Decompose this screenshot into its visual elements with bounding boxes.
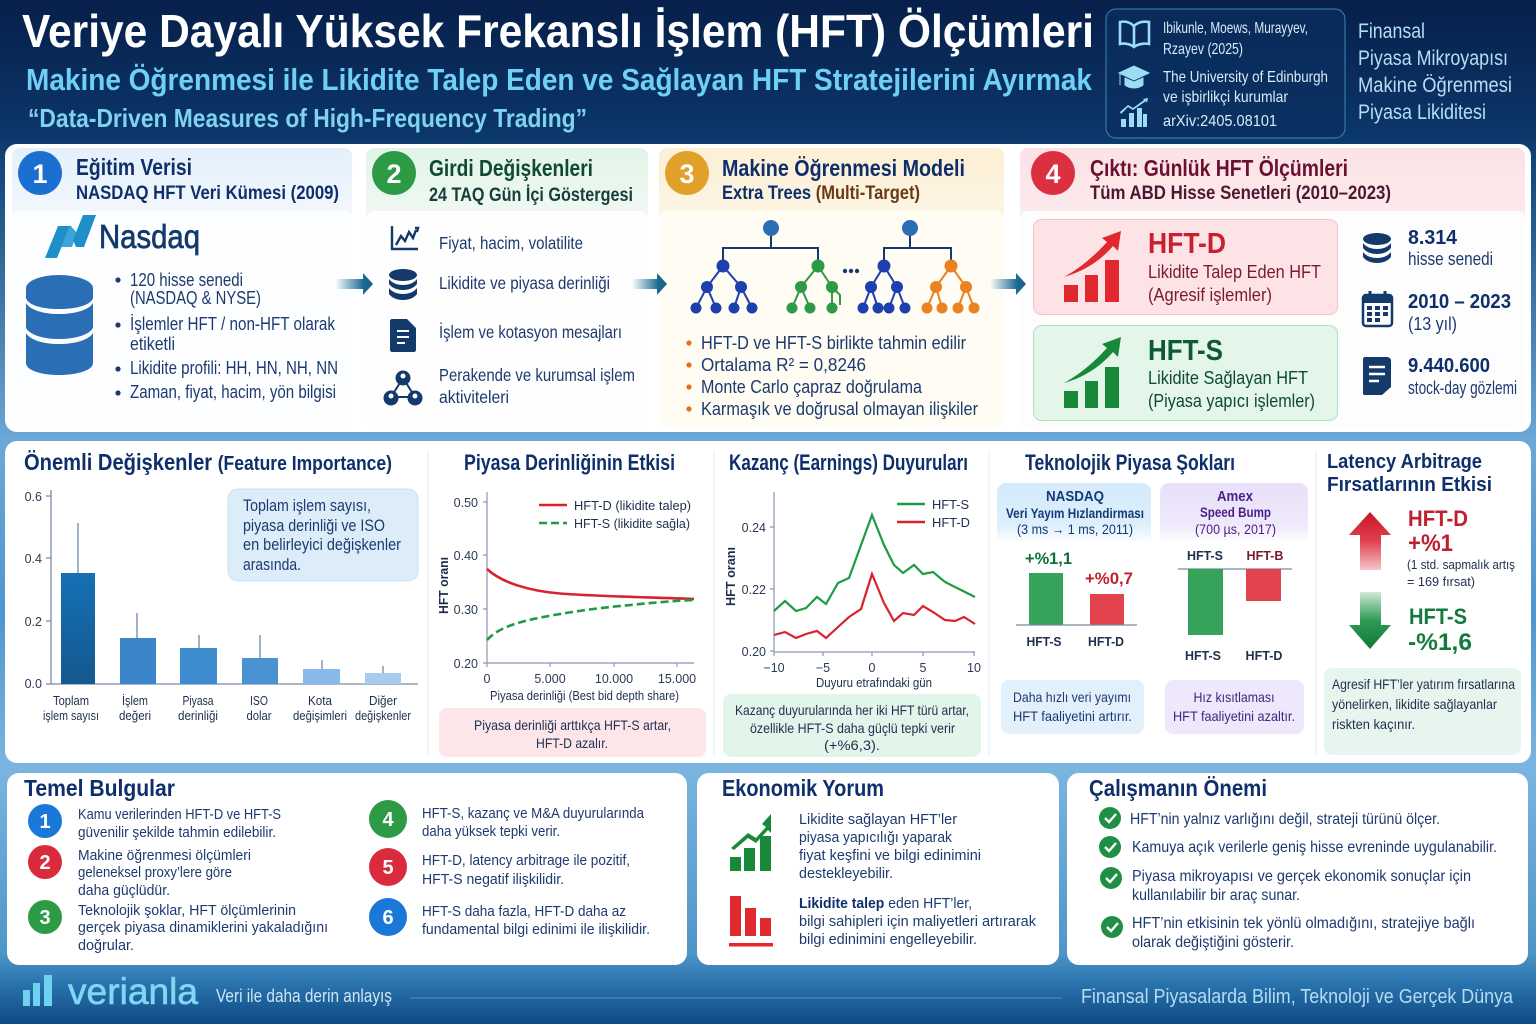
- line chart: 5: [920, 661, 927, 675]
- line chart: 0: [869, 661, 876, 675]
- check item 4: olarak değiştiğini gösterir.: [1132, 934, 1294, 951]
- topic tags: Piyasa Likiditesi: [1358, 101, 1486, 124]
- panel: input variables: [366, 148, 648, 427]
- bar chart: ISO: [250, 693, 268, 708]
- panel: training data: [12, 148, 352, 427]
- line chart: 0.50: [454, 496, 478, 510]
- bar chart: [1178, 548, 1292, 663]
- diagram: random forest trees: [690, 220, 980, 314]
- brand name: verianla: [68, 971, 198, 1012]
- callout: [1324, 668, 1521, 755]
- bar chart: derinliği: [178, 708, 218, 723]
- legend: HFT-S (likidite sağla): [574, 516, 690, 531]
- bar chart: +%1,1: [1025, 549, 1072, 568]
- stat: stocks: [1363, 227, 1493, 269]
- liquidity demanders text: bilgi edinimini engelleyebilir.: [799, 931, 977, 948]
- paper metadata text: [1163, 20, 1328, 130]
- heading: Önemli Değişkenler (Feature Importance): [24, 449, 392, 475]
- heading: Latency Arbitrage: [1327, 451, 1482, 473]
- training data bullets: etiketli: [130, 334, 175, 354]
- finding 1: 1: [39, 811, 51, 833]
- liquidity demanders text: [799, 895, 1036, 948]
- bar chart: Kota: [308, 693, 333, 708]
- step badge 2: 2: [386, 159, 402, 189]
- training data bullets: [115, 270, 338, 402]
- stat: stocks: hisse senedi: [1408, 249, 1493, 269]
- icon: Nasdaq logo: Nasdaq: [99, 218, 200, 255]
- line chart: 0.30: [454, 603, 478, 617]
- callout: Kazanç duyurularında her iki HFT türü artar,: [735, 702, 969, 718]
- step badge 4: 4: [1045, 159, 1061, 189]
- heading: Kazanç (Earnings) Duyuruları: [729, 450, 968, 475]
- input variable list: [439, 233, 635, 407]
- callout: Daha hızlı veri yayımı: [1013, 689, 1131, 705]
- check item 2: Kamuya açık verilerle geniş hisse evreninde uygulanabilir.: [1132, 839, 1497, 856]
- callout: [439, 708, 706, 757]
- input variable list: Likidite ve piyasa derinliği: [439, 273, 610, 293]
- callout: HFT-D azalır.: [536, 735, 608, 751]
- HFT-S effect: HFT-S: [1409, 604, 1467, 629]
- bar chart: [25, 490, 418, 723]
- callout: HFT faaliyetini artırır.: [1013, 708, 1132, 724]
- arrow: model to output: [990, 273, 1026, 295]
- callout: riskten kaçınır.: [1332, 716, 1415, 732]
- heading: Teknolojik Piyasa Şokları: [1025, 450, 1235, 475]
- icon: red bars: [729, 896, 773, 946]
- check item 1: HFT’nin yalnız varlığını değil, strateji türünü ölçer.: [1130, 811, 1440, 828]
- HFT-S effect: -%1,6: [1408, 629, 1472, 656]
- chart panel: technology shocks: [997, 450, 1308, 734]
- liquidity providers text: destekleyebilir.: [799, 865, 893, 882]
- callout: Hız kısıtlaması: [1194, 689, 1274, 705]
- liquidity demanders text: bilgi sahipleri için maliyetleri artırarak: [799, 913, 1036, 930]
- finding 3: Teknolojik şoklar, HFT ölçümlerinin: [78, 902, 296, 919]
- paper title: “Data-Driven Measures of High-Frequency Trading”: [28, 103, 587, 133]
- finding 3: gerçek piyasa dinamiklerini yakaladığını: [78, 919, 328, 936]
- finding 6: 6: [382, 907, 394, 929]
- bar chart: HFT-S: [1185, 648, 1221, 663]
- finding 5: HFT-S negatif ilişkilidir.: [422, 871, 564, 888]
- paper metadata text: Rzayev (2025): [1163, 41, 1243, 58]
- bar chart: HFT-D: [1246, 648, 1282, 663]
- step badge 3: [665, 151, 709, 195]
- card: Amex speed bump: [1160, 483, 1308, 663]
- icon: database: [26, 275, 93, 375]
- line chart: 5.000: [534, 672, 566, 686]
- icon: line chart: [392, 226, 418, 249]
- liquidity providers text: [799, 811, 981, 882]
- HFT-D effect: [1407, 506, 1515, 589]
- finding 2: 2: [39, 852, 51, 874]
- bar chart: Toplam: [53, 693, 89, 708]
- header: title block: [22, 5, 1094, 133]
- chart panel: feature importance: [24, 449, 418, 723]
- finding 2: geleneksel proxy’lere göre: [78, 864, 232, 881]
- bar chart: değişkenler: [355, 708, 412, 723]
- heading: Eğitim Verisi: [76, 154, 192, 180]
- panel: key findings: [7, 773, 687, 965]
- line chart: Piyasa derinliği (Best bid depth share): [490, 688, 679, 703]
- liquidity demanders text: Likidite talep eden HFT’ler,: [799, 895, 972, 912]
- icon: graduation cap: [1119, 66, 1149, 88]
- card: HFT-D: (Agresif işlemler): [1148, 285, 1272, 305]
- training data bullets: 120 hisse senedi: [130, 270, 243, 290]
- subheading: Extra Trees (Multi-Target): [722, 183, 920, 204]
- card: HFT-S: HFT-S: [1148, 335, 1223, 367]
- heading: Piyasa Derinliğinin Etkisi: [464, 450, 675, 475]
- HFT-D effect: (1 std. sapmalık artış: [1407, 557, 1515, 572]
- heading: Çalışmanın Önemi: [1089, 775, 1267, 801]
- legend: HFT-D: [932, 515, 970, 530]
- HFT-D effect: HFT-D: [1408, 506, 1468, 531]
- line chart: −10: [763, 661, 785, 675]
- paper info box: [1106, 9, 1345, 138]
- check item 2: [1099, 836, 1497, 858]
- finding 6: HFT-S daha fazla, HFT-D daha az: [422, 903, 626, 920]
- icon: red growth bars: [1064, 231, 1121, 302]
- line chart: [436, 492, 696, 703]
- heading: Girdi Değişkenleri: [429, 155, 593, 181]
- card: HFT-S: (Piyasa yapıcı işlemler): [1148, 391, 1315, 411]
- topic tags: [1358, 20, 1512, 124]
- bar chart: 0.4: [25, 552, 42, 566]
- title: Veriye Dayalı Yüksek Frekanslı İşlem (HFT) Ölçümleri: [22, 5, 1094, 57]
- finding 2: Makine öğrenmesi ölçümleri: [78, 847, 251, 864]
- topic tags: Makine Öğrenmesi: [1358, 74, 1512, 97]
- card: HFT-S: [1034, 326, 1338, 420]
- subheading: Tüm ABD Hisse Senetleri (2010–2023): [1090, 183, 1391, 204]
- card: HFT-S: Likidite Sağlayan HFT: [1148, 368, 1308, 388]
- finding 3: [28, 900, 328, 954]
- step badge 1: [18, 151, 62, 195]
- icon: database: [389, 269, 417, 300]
- bar chart: HFT-S: [1026, 634, 1062, 649]
- subheading: 24 TAQ Gün İçi Göstergesi: [429, 185, 633, 206]
- model bullets: [686, 332, 978, 419]
- line chart: 0: [484, 672, 491, 686]
- stat: period: [1363, 291, 1511, 334]
- line chart: [723, 492, 981, 690]
- callout: en belirleyici değişkenler: [243, 535, 401, 554]
- line chart: HFT oranı: [723, 547, 738, 606]
- panel: machine learning model: [659, 148, 1004, 427]
- chart panel: market depth: [436, 450, 706, 757]
- line chart: 15.000: [658, 672, 696, 686]
- callout: arasında.: [243, 555, 301, 574]
- bar chart: dolar: [246, 708, 272, 723]
- callout: Toplam işlem sayısı,: [243, 496, 371, 515]
- check item 3: Piyasa mikroyapısı ve gerçek ekonomik sonuçlar için: [1132, 868, 1471, 885]
- callout: (+%6,3).: [824, 737, 880, 753]
- stat: observations: [1363, 355, 1517, 398]
- paper metadata text: Ibikunle, Moews, Murayyev,: [1163, 20, 1308, 37]
- topic tags: Piyasa Mikroyapısı: [1358, 47, 1508, 70]
- model bullets: Karmaşık ve doğrusal olmayan ilişkiler: [701, 398, 978, 419]
- arrow: up: [1349, 512, 1391, 570]
- check item 1: [1099, 807, 1440, 829]
- stat: period: (13 yıl): [1408, 314, 1457, 334]
- step badge 1: 1: [32, 159, 48, 189]
- stat: period: 2010 – 2023: [1408, 291, 1511, 313]
- callout: [228, 489, 418, 581]
- HFT-D effect: = 169 fırsat): [1407, 574, 1475, 589]
- icon: green growth bars: [1064, 337, 1121, 408]
- model bullets: Monte Carlo çapraz doğrulama: [701, 376, 923, 397]
- footer: [23, 971, 1514, 1012]
- finding 6: fundamental bilgi edinimi ile ilişkilidir.: [422, 921, 650, 938]
- finding 3: 3: [39, 907, 51, 929]
- paper metadata text: ve işbirlikçi kurumlar: [1163, 89, 1289, 106]
- icon: growth chart: [1120, 98, 1148, 127]
- step badge 4: [1031, 151, 1075, 195]
- check item 4: [1101, 915, 1475, 951]
- check item 4: HFT’nin etkisinin tek yönlü olmadığını, stratejiye bağlı: [1132, 915, 1475, 932]
- callout: HFT faaliyetini azaltır.: [1173, 708, 1295, 724]
- bar chart: 0.6: [25, 490, 42, 504]
- panel: empirical results: [5, 441, 1531, 763]
- card: HFT-D: HFT-D: [1148, 228, 1226, 260]
- finding 5: 5: [382, 857, 394, 879]
- panel: economic interpretation: [697, 773, 1059, 965]
- arrow: data to inputs: [335, 273, 373, 295]
- bar chart: +%0,7: [1085, 569, 1133, 588]
- liquidity providers text: fiyat keşfini ve bilgi edinimini: [799, 847, 981, 864]
- finding 1: güvenilir şekilde tahmin edilebilir.: [78, 824, 276, 841]
- card: NASDAQ speedup: [997, 483, 1151, 663]
- step badge 2: [372, 151, 416, 195]
- finding 5: HFT-D, latency arbitrage ile pozitif,: [422, 852, 630, 869]
- line chart: 0.20: [454, 657, 478, 671]
- panel: pipeline: [5, 144, 1531, 432]
- bar chart: 0.2: [25, 615, 42, 629]
- icon: verianla logo: [23, 975, 52, 1006]
- bar chart: değeri: [119, 708, 151, 723]
- card: Amex speed bump: Speed Bump: [1200, 504, 1271, 520]
- bar chart: işlem sayısı: [43, 708, 99, 723]
- callout: [1001, 680, 1144, 734]
- HFT-S effect: [1408, 604, 1472, 656]
- card: Amex speed bump: Amex: [1217, 488, 1254, 505]
- card: NASDAQ speedup: Veri Yayım Hızlandirması: [1006, 505, 1144, 521]
- training data bullets: Zaman, fiyat, hacim, yön bilgisi: [130, 382, 336, 402]
- callout: yönelirken, likidite sağlayanlar: [1332, 696, 1497, 712]
- card: NASDAQ speedup: (3 ms → 1 ms, 2011): [1017, 521, 1133, 537]
- stat: stocks: 8.314: [1408, 227, 1458, 249]
- icon: people network: [384, 370, 422, 406]
- finding 4: 4: [382, 809, 394, 831]
- line chart: 0.24: [742, 521, 766, 535]
- bar chart: 0.0: [25, 677, 42, 691]
- callout: [723, 694, 981, 757]
- input variable list: Perakende ve kurumsal işlem: [439, 365, 635, 385]
- chart panel: earnings announcements: [723, 450, 981, 757]
- input variable list: Fiyat, hacim, volatilite: [439, 233, 583, 253]
- heading: Çıktı: Günlük HFT Ölçümleri: [1090, 155, 1348, 181]
- callout: Piyasa derinliği arttıkça HFT-S artar,: [474, 717, 671, 733]
- check item 3: kullanılabilir bir araç sunar.: [1132, 887, 1300, 904]
- panel: importance of the study: [1067, 773, 1528, 965]
- heading: Fırsatlarının Etkisi: [1327, 474, 1492, 496]
- finding 4: [369, 800, 645, 840]
- model bullets: Ortalama R² = 0,8246: [701, 354, 866, 375]
- paper metadata text: The University of Edinburgh: [1163, 69, 1328, 86]
- finding 4: daha yüksek tepki verir.: [422, 823, 560, 840]
- panel: daily HFT output: [1020, 148, 1525, 427]
- training data bullets: İşlemler HFT / non-HFT olarak: [130, 314, 336, 334]
- line chart: 0.40: [454, 549, 478, 563]
- line chart: 10: [967, 661, 981, 675]
- legend: [539, 498, 691, 531]
- line chart: 10.000: [595, 672, 633, 686]
- tagline: Veri ile daha derin anlayış: [216, 986, 392, 1006]
- bar chart: Diğer: [369, 693, 398, 708]
- card: HFT-D: [1034, 220, 1338, 314]
- bar chart: HFT-S: [1187, 548, 1223, 563]
- finding 1: Kamu verilerinden HFT-D ve HFT-S: [78, 806, 281, 823]
- panel: latency arbitrage: [1324, 451, 1521, 755]
- finding 4: HFT-S, kazanç ve M&A duyurularında: [422, 805, 645, 822]
- model bullets: HFT-D ve HFT-S birlikte tahmin edilir: [701, 332, 966, 353]
- line chart: 0.20: [742, 645, 766, 659]
- input variable list: aktiviteleri: [439, 387, 509, 407]
- icon: book: [1120, 22, 1149, 47]
- icon: green growth chart: [730, 814, 771, 871]
- legend: [897, 497, 970, 530]
- finding 2: [28, 845, 251, 899]
- training data bullets: Likidite profili: HH, HN, NH, NN: [130, 358, 338, 378]
- paper metadata text: arXiv:2405.08101: [1163, 113, 1277, 130]
- arrow: down: [1349, 592, 1391, 649]
- input variable list: İşlem ve kotasyon mesajları: [439, 322, 622, 342]
- arrow: inputs to model: [632, 273, 667, 295]
- finding 6: [369, 898, 650, 938]
- card: HFT-D: Likidite Talep Eden HFT: [1148, 262, 1321, 282]
- heading: [1327, 451, 1492, 496]
- bar chart: [1016, 549, 1137, 649]
- liquidity providers text: Likidite sağlayan HFT’ler: [799, 811, 957, 828]
- callout: piyasa derinliği ve ISO: [243, 516, 385, 535]
- finding 3: doğrular.: [78, 937, 134, 954]
- line chart: Duyuru etrafındaki gün: [816, 675, 932, 690]
- training data bullets: (NASDAQ & NYSE): [130, 288, 261, 308]
- icon: Nasdaq logo: [45, 215, 200, 258]
- line chart: 0.22: [742, 583, 766, 597]
- finding 5: [369, 848, 630, 888]
- legend: HFT-D (likidite talep): [574, 498, 691, 513]
- legend: HFT-S: [932, 497, 969, 512]
- bar chart: değişimleri: [293, 708, 347, 723]
- callout: [1165, 680, 1304, 734]
- check item 3: [1100, 867, 1471, 904]
- subtitle: Makine Öğrenmesi ile Likidite Talep Eden ve Sağlayan HFT Stratejilerini Ayırmak: [26, 62, 1093, 97]
- subheading: NASDAQ HFT Veri Kümesi (2009): [76, 183, 339, 204]
- card: Amex speed bump: (700 µs, 2017): [1195, 521, 1276, 537]
- callout: özellikle HFT-S daha güçlü tepki verir: [750, 720, 955, 736]
- bar chart: HFT-B: [1246, 548, 1284, 563]
- heading: Temel Bulgular: [24, 775, 175, 801]
- line chart: −5: [816, 661, 830, 675]
- liquidity providers text: piyasa yapıcılığı yaparak: [799, 829, 952, 846]
- stat: observations: 9.440.600: [1408, 355, 1490, 377]
- heading: Ekonomik Yorum: [722, 775, 884, 801]
- step badge 3: 3: [679, 159, 695, 189]
- bar chart: Piyasa: [182, 693, 214, 708]
- topic tags: Finansal: [1358, 20, 1425, 43]
- icon: document: [390, 319, 416, 352]
- finding 1: [28, 804, 281, 841]
- card: NASDAQ speedup: NASDAQ: [1046, 488, 1104, 505]
- HFT-D effect: +%1: [1408, 530, 1453, 557]
- callout: Agresif HFT’ler yatırım fırsatlarına: [1332, 676, 1515, 692]
- heading: Makine Öğrenmesi Modeli: [722, 155, 965, 181]
- bar chart: İşlem: [122, 693, 148, 708]
- finding 2: daha güçlüdür.: [78, 882, 170, 899]
- bar chart: HFT-D: [1088, 634, 1124, 649]
- line chart: HFT oranı: [436, 557, 451, 614]
